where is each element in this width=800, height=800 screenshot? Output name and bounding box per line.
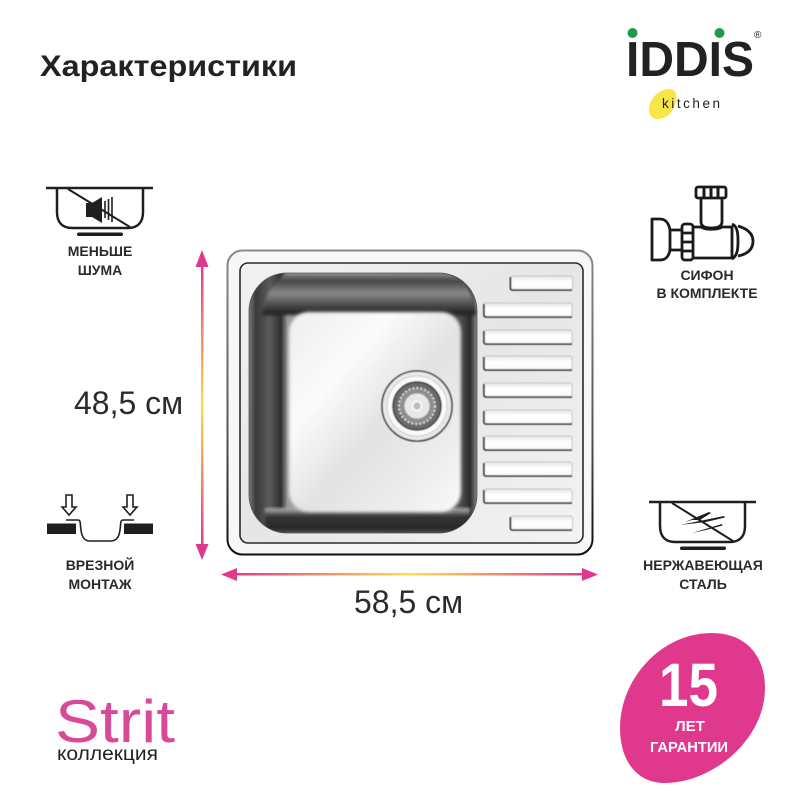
badge number: 15 — [659, 651, 718, 719]
logo kitchen word: kitchen — [662, 96, 720, 111]
icon: sound waves — [105, 197, 112, 222]
icon: steel sink outline — [649, 502, 756, 542]
sink deck — [240, 263, 583, 543]
label: steel: СТАЛЬ — [679, 576, 727, 592]
logo: IDDIS kitchen — [626, 28, 762, 119]
label: noise second line: ШУМА — [78, 262, 122, 278]
bowl outline — [249, 273, 477, 533]
icon: speaker — [86, 197, 102, 223]
drain outer ring — [382, 371, 452, 441]
drain center — [412, 402, 422, 410]
warranty badge — [620, 633, 765, 783]
label: less noise: МЕНЬШЕ — [68, 243, 132, 259]
height arrow — [196, 250, 208, 560]
drain teeth — [399, 388, 435, 424]
icon: countertop slabs — [47, 524, 153, 534]
icon: sink profile — [66, 520, 134, 541]
drain basket — [393, 382, 441, 430]
title: Характеристики — [40, 50, 297, 83]
drain — [382, 371, 452, 441]
height arrow shaft — [201, 262, 204, 548]
icon: noise sink outline — [46, 188, 153, 228]
drain plug — [404, 393, 430, 419]
bowl back wall — [262, 272, 476, 315]
height arrow heads — [196, 250, 208, 560]
logo wordmark: IDDIS — [626, 33, 754, 87]
width arrow shaft — [232, 573, 587, 576]
bowl walls — [249, 273, 477, 533]
width arrow heads — [221, 568, 598, 581]
bowl bottom wall — [265, 508, 470, 535]
drain flange — [387, 376, 447, 436]
width arrow — [221, 568, 598, 581]
label: mounting: МОНТАЖ — [68, 576, 132, 592]
badge line 1: ЛЕТ — [675, 718, 705, 735]
logo green dots — [628, 28, 724, 38]
label: stainless: НЕРЖАВЕЮЩАЯ — [643, 557, 763, 573]
icon: stainless steel — [643, 502, 763, 592]
width label: 58,5 см — [354, 584, 463, 620]
icon: siphon body — [652, 187, 753, 260]
logo yellow blob — [649, 89, 677, 119]
icon: siphon included — [652, 187, 758, 301]
badge line 2: ГАРАНТИИ — [650, 739, 728, 756]
icon: scratches — [680, 512, 725, 533]
icon: steel base bar — [680, 546, 726, 550]
sink rim — [228, 250, 592, 554]
icon: mounting arrows — [62, 495, 137, 515]
label: included: В КОМПЛЕКТЕ — [656, 285, 758, 301]
height label: 48,5 см — [74, 385, 183, 421]
label: siphon: СИФОН — [680, 267, 734, 283]
collection caption: коллекция — [57, 744, 158, 765]
icon: built-in mounting — [47, 495, 153, 592]
bowl floor — [289, 312, 461, 512]
badge blob — [620, 633, 765, 783]
icon: sink base bar — [77, 232, 123, 236]
label: built-in: ВРЕЗНОЙ — [66, 556, 134, 573]
sink bowl — [249, 272, 477, 535]
sink photo — [228, 250, 592, 554]
icon: less noise — [46, 188, 153, 278]
drainboard ribs — [484, 276, 572, 530]
rib fills — [484, 276, 572, 530]
rib shadows — [484, 277, 572, 530]
registered mark: ® — [754, 30, 762, 41]
collection name: Strit — [55, 688, 175, 755]
